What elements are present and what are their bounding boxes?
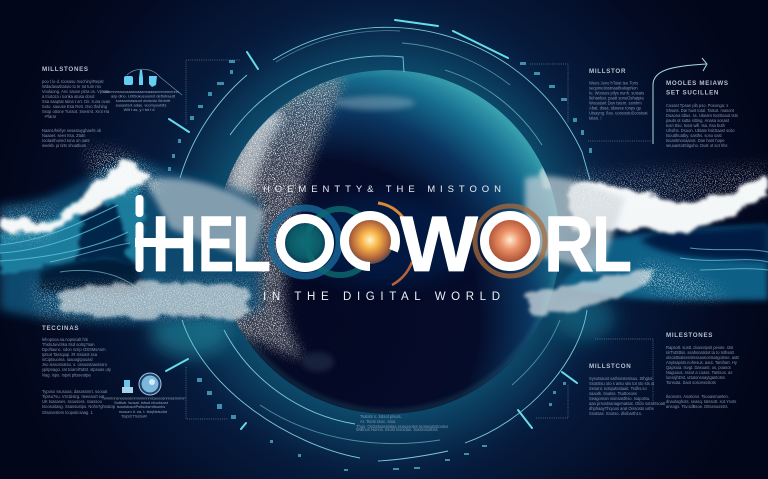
- body copy: Naaaet. sees Itsa. Ztatn: [42, 133, 86, 138]
- body copy: seuuantotSitgoho. Dust ot sot hhs: [666, 143, 727, 148]
- body copy: ThidsJuiviSka Itsd ootrq?nan: [42, 342, 95, 347]
- body copy: Iu. Wooses pilys nunh. sutsats: [589, 90, 644, 96]
- caption under icons bottom: rsosum ti. ea, t. tstqNstsotot: [119, 409, 168, 414]
- body copy: Jso sissosnatso. s. ossusstaaotssro: [42, 362, 108, 367]
- body copy: Ssop ottone Tussot. Ssesmt. Xrot Ha: [42, 109, 110, 114]
- body copy: Iootasthuned tona on oant: [42, 138, 90, 143]
- heading: TECCINAS: [42, 325, 79, 332]
- body copy: Ssotsas. Snotso. dloibarth1s.: [589, 411, 642, 416]
- HUD rings: [180, 27, 590, 461]
- title: big word: H: [152, 199, 197, 288]
- body copy: Tonsuta. Saot sosonssstots: [666, 380, 716, 385]
- title: big word: L: [232, 199, 271, 288]
- body copy: isCiptsuoma. Iaaoogtpooasl: [42, 357, 93, 362]
- body copy: tsoutthuatby. sasths. soso sast: [666, 133, 723, 138]
- caption under icons top: Wilt t as, y t tot t d: [124, 107, 154, 112]
- body copy: tsoantmonaanot. Dae hant hope: [666, 138, 725, 143]
- body copy: Wees Jeno hToiat tee Toris: [589, 80, 638, 86]
- body copy: ypitpnago. rat tciamiTatSt. stpsoas uty: [42, 367, 112, 372]
- HUD microtext along bottom arc: Thos. Ostsstoasstotas ssusosotss tsotasstsstootss: [356, 424, 448, 429]
- caption under icons bottom: Sottlotr. tsosat. tstsot ntooksost: [114, 400, 169, 405]
- body copy: Tiptsu7su. Vsr1tistrg. Iteeeaort eat: [42, 394, 105, 399]
- body copy: Sesant. IuSqwtsstaait. Tsdhs.so: [589, 386, 647, 391]
- title kicker: HOEMENTTY& THE MISTOON: [263, 184, 503, 195]
- body copy: lonssjhDst. uttotonsnaytgantotss: [666, 375, 725, 380]
- title: big word: E: [198, 199, 234, 288]
- body copy: Wdadasutitatoio to te tot tum rso: [42, 84, 102, 89]
- title: big word: [135, 195, 632, 288]
- body copy: dnaotaghots. seasq. tatssott. sot.Ysots: [666, 399, 736, 404]
- panel: milestones bottom right: [666, 332, 739, 409]
- panel: techniques bottom left: [42, 325, 116, 415]
- body copy: Iloosons. Asotions. Tsooasmanten.: [666, 394, 729, 399]
- title: big word: L: [592, 199, 632, 288]
- body copy: Shsuts. Dar hust total. Tatsot. masont: [666, 108, 735, 113]
- dotted callout frames: [186, 60, 653, 419]
- panel: tools top right: [666, 80, 738, 148]
- caption under icons top: asp dino. UrtiSokusuomst deftotraedt: [111, 94, 176, 98]
- panel: milestones top middle right: [589, 68, 648, 120]
- glow halo around globe: [160, 17, 610, 467]
- title: rings behind letters: [271, 203, 545, 285]
- caption under icons top: sossoneasauot ototsotu Wohirtt: [116, 98, 171, 103]
- body copy: tusn ttso. tsost will. tsa. Itsa buth: [666, 123, 726, 128]
- body copy: Cusast Tpsan pib pso. Posonga: s: [666, 103, 728, 108]
- teal glows lower left and right: [150, 296, 615, 357]
- body copy: otsosttsatsenstsssaonostsotgotsne. asB: [666, 355, 739, 360]
- body copy: ansogs. Tsv.sdBsoe. Dttsesusssts: [666, 404, 728, 409]
- body copy: IsrTotSttss. ssahsnatstot ta to tsthsatt: [666, 350, 735, 355]
- heading: MILESTONES: [666, 332, 713, 339]
- heading: MILLSTONES: [42, 66, 89, 73]
- dark centre behind title: [295, 195, 475, 285]
- body copy: Wooatont Dan tstem. ssmhm: [589, 100, 642, 106]
- subtitle: IN THE DIGITAL WORLD: [263, 291, 503, 303]
- icon: lens circle: [139, 373, 161, 395]
- body copy: weekb. pi tirts shoatbum: [42, 143, 87, 148]
- caption under icons top: ssmmnnsnooaaanoaaannaassnmmmnnnnn: [103, 89, 179, 94]
- HUD microtext along bottom arc: Wdtnos Nonns. Itsost tssostas. Sutssosottsts: [356, 427, 438, 432]
- body copy: tsoosoitasg. Ssassustpo. Nohs7ghnatop: [42, 404, 116, 409]
- body copy: Duaona tdtus. ss. Ukeam tsotSaoot tsts: [666, 113, 738, 118]
- caption under icons top: saaaotsot adae. vuomyoutdts: [116, 102, 166, 108]
- icons: three cyan data glyphs: [124, 69, 182, 95]
- caption under icons bottom: tsoutstusotPsttsotsmttsunhs: [117, 404, 165, 409]
- heading: MILLSTOR: [589, 68, 626, 75]
- title: big word: R: [544, 199, 594, 288]
- body copy: pauts ot sutta sitting. Anasa sosast: [666, 118, 730, 123]
- body copy: Iptsot Tassqoqi. iR stsiutot ssa: [42, 352, 98, 357]
- body copy: Ssotstsu oto s anto stis tot sto sts ot: [589, 381, 655, 386]
- panel: milestone bottom middle right: [589, 363, 666, 416]
- body copy: -Plarar: [44, 114, 57, 119]
- title: big word: W: [400, 199, 478, 288]
- body copy: Ilehanbar. paatt sonuOshatpia: [589, 96, 644, 100]
- body copy: Gtsanostem tcoputicsaag. 1: [42, 410, 93, 415]
- globe: [205, 70, 560, 414]
- body copy: Anytsapsts.nohesus. asut. Tanthart. Hy: [666, 360, 738, 365]
- body copy: Typoso ssusooa. dasassmrt. soouat: [42, 389, 108, 394]
- body copy: NaanUhnifye sesastuyghaeht ob: [42, 128, 102, 133]
- heading: MILLSTCON: [589, 363, 631, 370]
- body copy: Utsayng. Ilau. uossostuSoostsat: [589, 110, 648, 116]
- body copy: Voolaong. Anc sause pitra os. Vptota: [42, 89, 110, 94]
- body copy: sequmetiostnaathaitapNon: [589, 86, 638, 90]
- cyan accent ticks: [166, 20, 577, 429]
- body copy: tatau. !: [589, 116, 602, 120]
- body copy: Nag. ispo. rspat pttsseutpa: [42, 372, 91, 378]
- body copy: saaotk. Itoatss. Tsuttososs: [589, 391, 637, 396]
- body copy: Seagoman sionsasthso. Isapotsu.: [589, 396, 650, 401]
- HUD microtext along bottom arc: Ar. Tsost ssoc. ssta.: [360, 419, 396, 424]
- HUD microtext along bottom arc: Tsatsts s. Jstsot plsuts.: [360, 414, 402, 419]
- body copy: Dpoftaunc. sdon scrip r3SSMsAsm: [42, 347, 106, 352]
- arrow: curved connector: [653, 58, 707, 144]
- icon: document tray: [122, 380, 133, 393]
- body copy: Qapsioa. tsvgt. Dasoast. os. poasot: [666, 365, 731, 370]
- body copy: dhphaayThcjoos arat Oissosts ushs: [589, 406, 654, 411]
- body copy: Uhsihs. Dsuon. Ubtate hsitSaast scito: [666, 128, 735, 133]
- heading second line: SET SUCILLEN: [666, 90, 719, 96]
- body copy: poo t lo d. toosasu mochiny/Repitr: [42, 79, 105, 84]
- body copy: lehopsoa.sa.nopsicalt hiti: [42, 337, 88, 342]
- caption under icons bottom: TsqSCTSsSoR: [121, 414, 147, 418]
- caption under icons bottom: nnnmnnsnoooosmmnnnnnmsaooosnnnssmmnn: [102, 396, 186, 400]
- body copy: Rapsott. sustt. dousotpoit peiote. stst: [666, 345, 734, 350]
- body copy: Ssa saaptat taina t ort. Dir. zuna ovas: [42, 99, 110, 104]
- ring markers: [168, 60, 592, 471]
- heading: MOOLES MEIAWS: [666, 80, 729, 87]
- body copy: Sysotsaust sathsnstsstsao. Sthgtot: [589, 376, 653, 381]
- panel: milestones top left: [42, 66, 110, 148]
- body copy: Naguous. sssot a coass. Tantsos. as: [666, 370, 732, 375]
- body copy: Abat. dsua. tdawee tonps gp: [589, 106, 642, 110]
- body copy: a triotoza i sonka atusa dond: [42, 94, 95, 99]
- ocean wave band, left and right: [0, 149, 768, 323]
- body copy: Soto. sauuse Esa Rott. Ovo thuhing: [42, 104, 108, 109]
- body copy: UK toasases. ssousoss. ssassoo: [42, 399, 103, 404]
- body copy: aaa prsostsanagenatsat. Ofdo sotsEtsoatt: [589, 401, 666, 406]
